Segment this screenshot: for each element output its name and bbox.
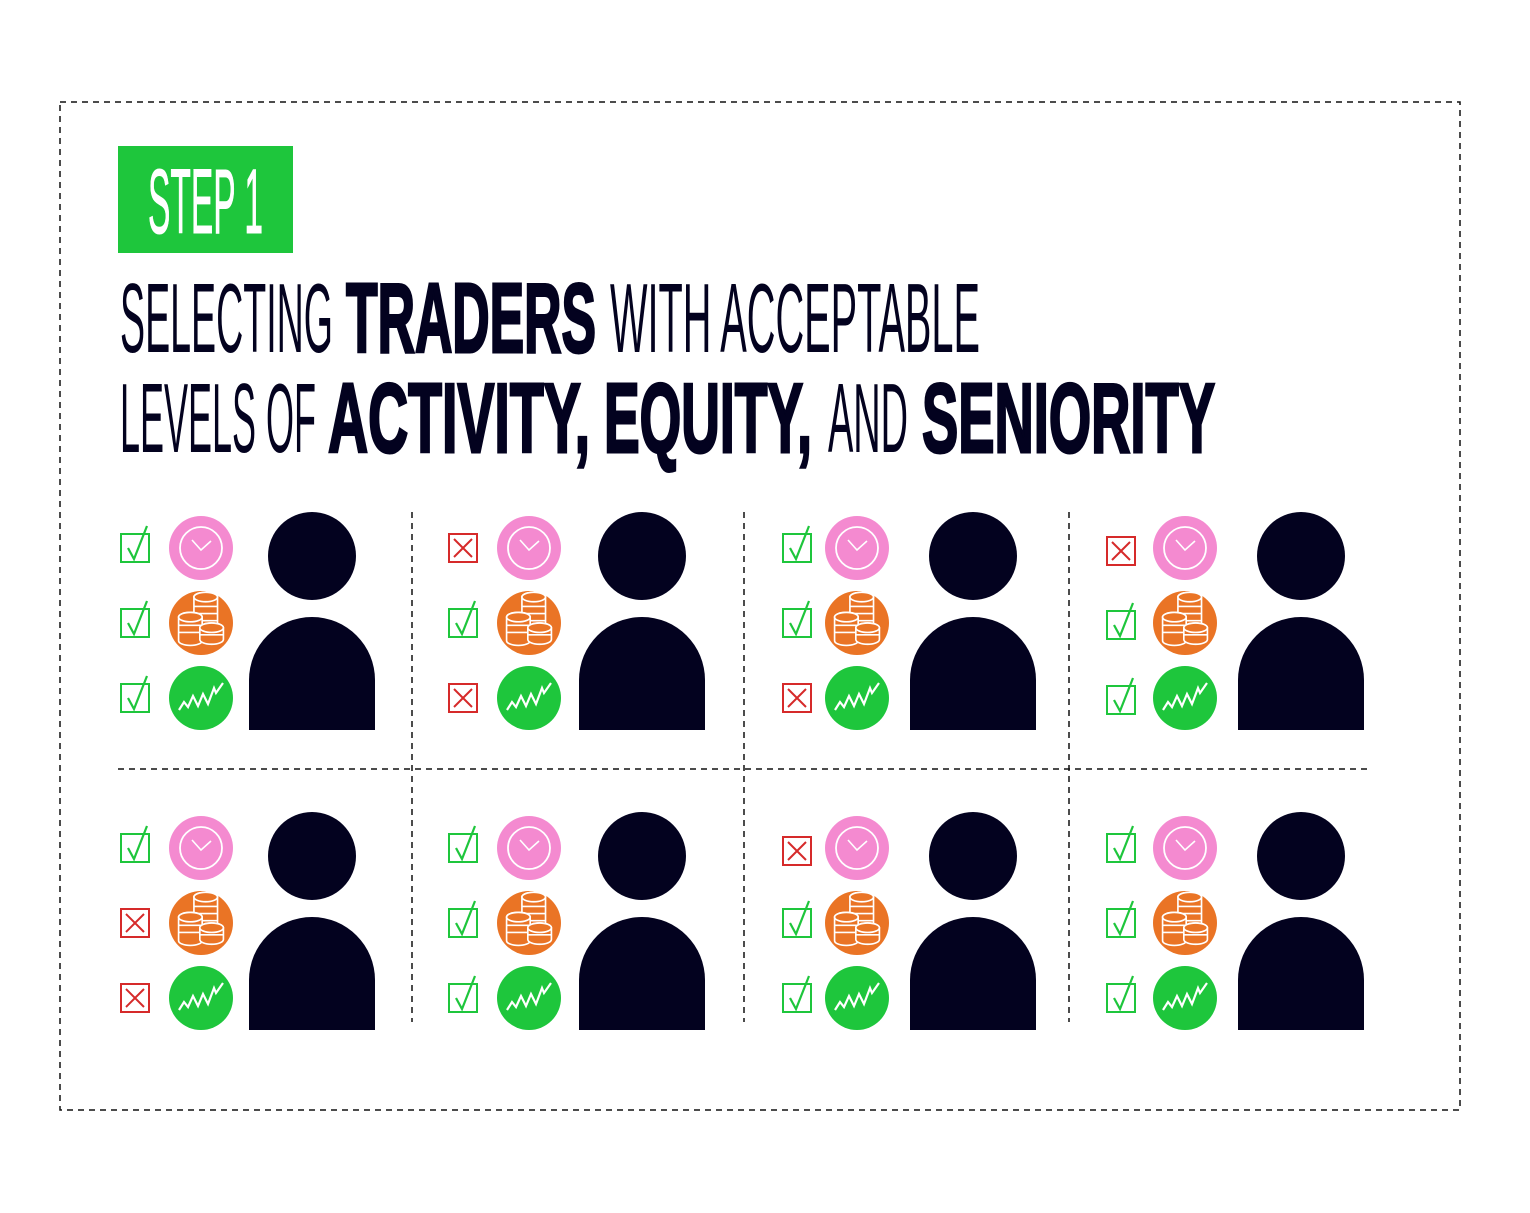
outer dashed frame — [60, 102, 1460, 1110]
title: AND — [828, 363, 908, 473]
trader 1 — [121, 512, 375, 730]
title: SENIORITY — [922, 363, 1215, 473]
trader 7 — [783, 812, 1036, 1030]
title: WITH ACCEPTABLE — [610, 263, 980, 373]
step badge — [118, 146, 293, 253]
trader 3 — [783, 512, 1036, 730]
trader 2 — [449, 512, 705, 730]
grid dividers — [118, 512, 1370, 1022]
title: TRADERS — [346, 263, 596, 373]
title — [120, 263, 1215, 473]
title: EQUITY, — [604, 363, 812, 473]
trader 6 — [449, 812, 705, 1030]
title: LEVELS OF — [120, 363, 316, 473]
trader 8 — [1107, 812, 1364, 1030]
text: STEP 1 — [148, 151, 263, 253]
title: SELECTING — [120, 263, 333, 373]
trader 5 — [121, 812, 375, 1030]
trader 4 — [1107, 512, 1364, 730]
title: ACTIVITY, — [328, 363, 590, 473]
